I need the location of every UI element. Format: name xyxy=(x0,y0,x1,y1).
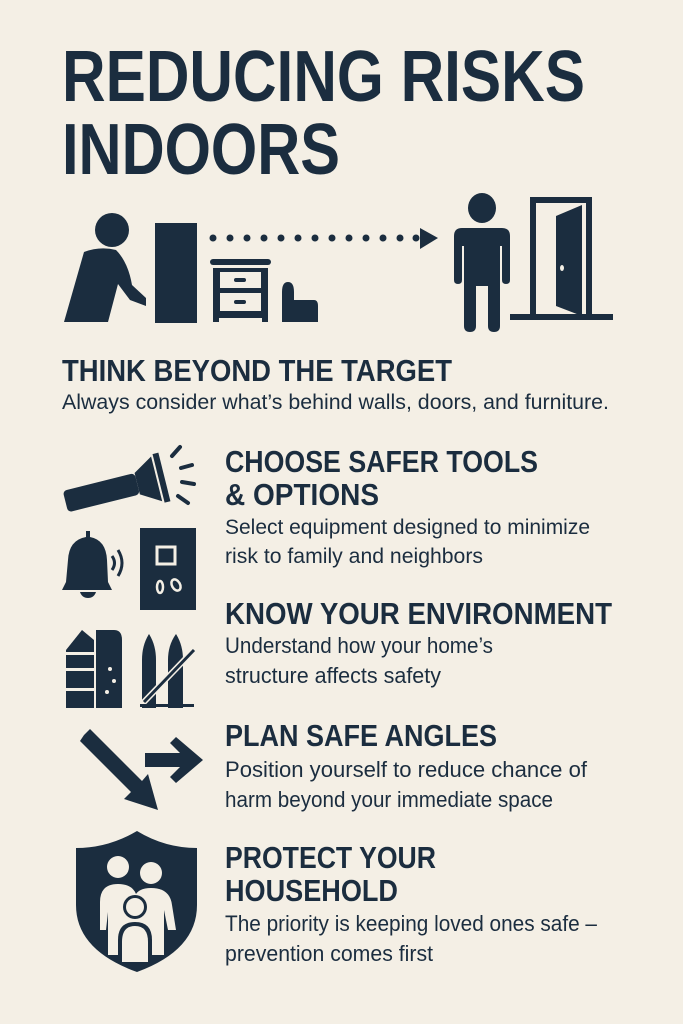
section: choose safer tools xyxy=(225,444,590,568)
section: think beyond the target: Always consider what’s behind walls, doors, and furniture. xyxy=(62,391,609,414)
icon: wall xyxy=(155,223,197,323)
section: choose safer tools: Select equipment designed to minimize xyxy=(225,516,590,539)
section: protect your household: prevention comes first xyxy=(225,941,433,966)
icon: shield with family xyxy=(76,831,197,972)
illustration: person behind wall, line of travel to person by door xyxy=(64,193,613,332)
icon: building structure xyxy=(66,630,122,708)
section: know your environment: structure affects safety xyxy=(225,663,441,688)
icon: crossed-out bullets xyxy=(140,634,194,708)
section: protect your household: HOUSEHOLD xyxy=(225,873,398,908)
section: know your environment xyxy=(225,596,612,688)
icon: alarm bell xyxy=(62,531,122,598)
icon: chair xyxy=(282,282,318,322)
icon: standing person xyxy=(454,193,510,332)
title: REDUCING RISKS xyxy=(62,37,585,117)
section: plan safe angles: PLAN SAFE ANGLES xyxy=(225,718,497,753)
arrow: dotted line xyxy=(210,228,438,249)
icon: control panel xyxy=(140,528,196,610)
section: choose safer tools: CHOOSE SAFER TOOLS xyxy=(225,444,538,479)
section: protect your household: The priority is keeping loved ones safe – xyxy=(225,911,598,936)
section: know your environment: Understand how your home’s xyxy=(225,633,493,658)
section: protect your household: PROTECT YOUR xyxy=(225,840,436,875)
section: protect your household xyxy=(225,840,598,966)
title xyxy=(62,37,585,190)
section: plan safe angles: harm beyond your immediate space xyxy=(225,787,553,812)
section: plan safe angles: Position yourself to reduce chance of xyxy=(225,757,588,782)
icon: crouching person xyxy=(64,213,146,322)
section: know your environment: KNOW YOUR ENVIRONMENT xyxy=(225,596,612,631)
section: think beyond the target xyxy=(62,353,609,414)
icon: flashlight xyxy=(59,447,194,526)
icon: angle arrows xyxy=(80,729,203,810)
section: think beyond the target: THINK BEYOND THE TARGET xyxy=(62,353,452,388)
section: plan safe angles xyxy=(225,718,588,812)
icon: open door xyxy=(510,197,613,320)
title: INDOORS xyxy=(62,110,340,190)
icon: drawer xyxy=(210,259,271,322)
section: choose safer tools: risk to family and neighbors xyxy=(225,545,483,568)
section: choose safer tools: & OPTIONS xyxy=(225,477,379,512)
